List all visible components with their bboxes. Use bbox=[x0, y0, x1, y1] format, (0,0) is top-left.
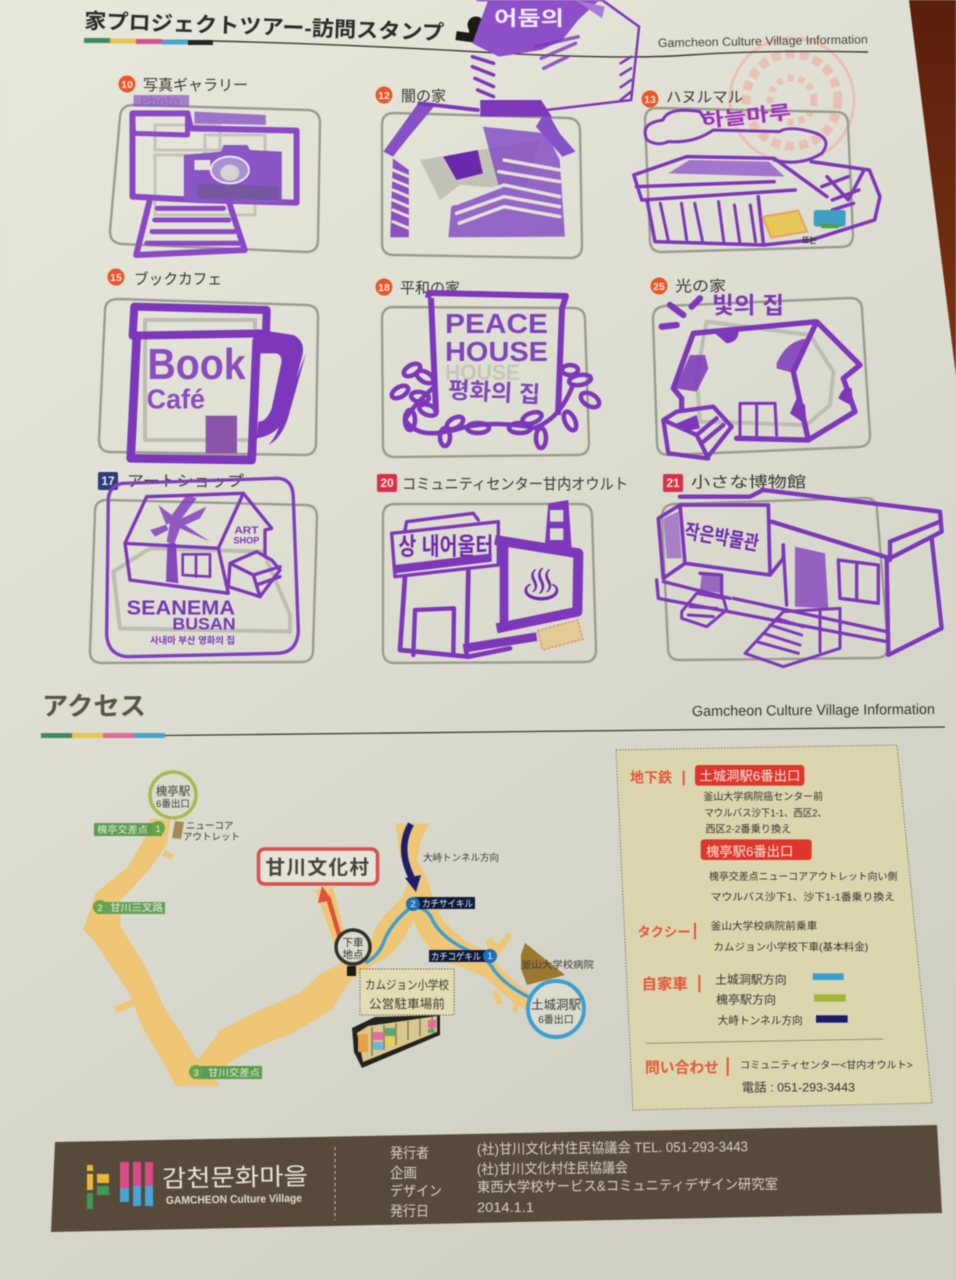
stamp card 25: house of light bbox=[650, 278, 870, 458]
card outline bbox=[653, 298, 870, 455]
imprint values: (社)甘川文化村住民協議会 bbox=[477, 1159, 628, 1177]
stamp lettering: 평화의 집 bbox=[448, 377, 541, 408]
card outline bbox=[662, 498, 888, 660]
navy label 1: カチコゲキル bbox=[431, 951, 481, 963]
green label 2: 2 bbox=[97, 903, 103, 914]
car section: 槐亭駅方向 bbox=[716, 992, 776, 1006]
stamp art gift house: 사내마 부산 영화의 집 bbox=[150, 635, 235, 646]
stamp lettering: 하늘마루 bbox=[700, 101, 792, 133]
green label 3 bbox=[189, 1065, 262, 1079]
taxi section: タクシー bbox=[637, 925, 691, 940]
imprint values bbox=[477, 1138, 778, 1215]
stamp card 17: art shop bbox=[90, 472, 317, 663]
stamp art building right bbox=[463, 500, 583, 650]
label: 写真ギャラリー bbox=[143, 76, 248, 94]
badge: 12 bbox=[378, 90, 390, 102]
parking label bbox=[360, 969, 454, 1015]
new core outlet: ニューコア bbox=[186, 821, 234, 832]
section header: access bbox=[41, 693, 945, 738]
stamp art house bbox=[383, 100, 576, 237]
contact section: コミュニティセンター<甘内オウルト> bbox=[740, 1058, 913, 1071]
stamp art building bbox=[634, 110, 880, 245]
stamp lettering: Photo bbox=[140, 93, 180, 109]
stamp card 13: hanulmaru bbox=[634, 89, 880, 252]
imprint values: 東西大学校サービス&コミュニティデザイン研究室 bbox=[477, 1176, 778, 1195]
stamp card 15: book cafe bbox=[99, 268, 318, 460]
logo korean: 감천문화마을 bbox=[162, 1163, 308, 1193]
tunnel direction: 大峙トンネル方向 bbox=[423, 852, 499, 864]
subway section: 地下鉄 bbox=[630, 770, 672, 786]
subway section: 槐亭交差点ニューコアアウトレット向い側 bbox=[709, 870, 897, 883]
card outline bbox=[383, 504, 596, 663]
badge bbox=[377, 474, 397, 492]
title: 家プロジェクトツアー-訪問スタンプ bbox=[84, 10, 444, 45]
card outline bbox=[645, 108, 853, 252]
stamp art building left: 상 내어울터 bbox=[398, 533, 493, 560]
village name box bbox=[258, 849, 378, 884]
navy arrow bbox=[404, 824, 421, 892]
panel contents bbox=[630, 765, 913, 1095]
small note: 또는 bbox=[802, 236, 817, 245]
badge bbox=[376, 86, 392, 104]
green label 2 bbox=[93, 900, 165, 914]
stamp card 18: peace house bbox=[376, 278, 602, 457]
hospital bbox=[521, 943, 595, 985]
green label 2: 甘川三叉路 bbox=[110, 902, 164, 914]
subway section: 釜山大学病院癌センター前 bbox=[703, 790, 823, 803]
roads bbox=[83, 818, 533, 1086]
stamp card 20: community center bbox=[377, 474, 628, 663]
access colour strip bbox=[41, 733, 165, 738]
stamp lettering: PEACE bbox=[445, 308, 548, 339]
footer background bbox=[51, 1125, 942, 1232]
imprint values: 2014.1.1 bbox=[477, 1199, 534, 1215]
contact section: 問い合わせ bbox=[645, 1060, 719, 1077]
school building bbox=[352, 1015, 440, 1068]
green label 3: 3 bbox=[193, 1068, 199, 1079]
badge bbox=[650, 278, 668, 294]
label: ハヌルマル bbox=[666, 89, 743, 106]
stamp art leaf garland bbox=[390, 361, 602, 448]
hospital: 釜山大学校病院 bbox=[521, 959, 595, 971]
stamp art museum: 작은박물관 bbox=[683, 520, 761, 555]
new core outlet: アウトレット bbox=[183, 832, 240, 843]
stamp lettering bbox=[445, 308, 548, 408]
badge: 25 bbox=[653, 281, 665, 293]
subway section: マウルバス沙下1-1、西区2、 bbox=[704, 806, 827, 819]
subway section: マウルバス沙下1、沙下1-1番乗り換え bbox=[711, 890, 895, 903]
drop-off pin: 下車 bbox=[342, 936, 364, 949]
station: toseong-dong: 6番出口 bbox=[538, 1014, 574, 1026]
subway section: 槐亭駅6番出口 bbox=[706, 843, 793, 859]
stamp frame bbox=[428, 293, 566, 415]
car section bbox=[642, 972, 848, 1027]
top stamp caption: 어둠의 bbox=[494, 7, 564, 30]
stamp art mug: Café bbox=[147, 383, 205, 414]
station: goejeong bbox=[150, 772, 196, 818]
pink round seal bbox=[730, 38, 854, 162]
info panel bbox=[616, 745, 932, 1110]
badge: 15 bbox=[110, 272, 122, 284]
subway section: 土城洞駅6番出口 bbox=[699, 769, 800, 784]
badge bbox=[118, 76, 136, 92]
icon: stamp bbox=[455, 16, 486, 44]
station: toseong-dong: 土城洞駅 bbox=[531, 998, 581, 1012]
badge: 10 bbox=[121, 79, 133, 91]
imprint labels: 発行日 bbox=[390, 1203, 429, 1219]
header rule bbox=[212, 41, 868, 57]
card outline bbox=[110, 105, 320, 252]
drop-off pin bbox=[336, 930, 370, 976]
panel divider bbox=[646, 1039, 883, 1043]
label: アートショップ bbox=[127, 473, 244, 490]
parking label: 公営駐車場前 bbox=[369, 996, 445, 1011]
logo english: GAMCHEON Culture Village bbox=[166, 1193, 302, 1207]
contact section bbox=[645, 1057, 913, 1095]
stamp art building left bbox=[392, 513, 510, 657]
stamp lettering: HOUSE bbox=[445, 336, 548, 367]
car section: 土城洞駅方向 bbox=[715, 972, 787, 986]
badge bbox=[98, 472, 118, 490]
badge bbox=[642, 90, 658, 108]
stamp art gift house: SHOP bbox=[233, 535, 259, 545]
access map bbox=[83, 772, 595, 1086]
drop-off pin: 地点 bbox=[342, 948, 364, 961]
new core outlet bbox=[172, 821, 240, 843]
label: 闇の家 bbox=[401, 88, 446, 105]
station: goejeong: 槐亭駅 bbox=[156, 784, 191, 798]
badge: 20 bbox=[380, 476, 394, 490]
stamp card 10: photo gallery bbox=[110, 76, 320, 255]
card outline bbox=[99, 299, 318, 455]
navy label 2 bbox=[406, 897, 475, 911]
imprint values: (社)甘川文化村住民協議会 TEL. 051-293-3443 bbox=[477, 1138, 748, 1157]
printed art bbox=[420, 140, 540, 200]
panel background bbox=[616, 745, 932, 1110]
stamp art museum bbox=[657, 490, 942, 667]
green label 1 bbox=[94, 821, 165, 836]
red arrow to village bbox=[318, 886, 340, 938]
stamp art camera bbox=[132, 95, 297, 255]
card outline bbox=[90, 500, 317, 663]
parking label: カムジョン小学校 bbox=[365, 977, 449, 992]
imprint labels: 企画 bbox=[390, 1165, 417, 1181]
printed art bbox=[155, 125, 265, 215]
label: 平和の家 bbox=[400, 280, 460, 297]
navy label 1 bbox=[429, 949, 497, 963]
label: 小さな博物館 bbox=[691, 474, 806, 491]
stamp art gift house bbox=[107, 478, 298, 657]
label: 光の家 bbox=[675, 278, 726, 295]
green label 1: 槐亭交差点 bbox=[97, 824, 149, 836]
stamp art gift house: BUSAN bbox=[172, 614, 236, 633]
badge: 13 bbox=[644, 94, 656, 106]
stamp art house bbox=[662, 298, 860, 458]
footer band bbox=[51, 1125, 942, 1232]
wooden table corner bbox=[909, 0, 956, 376]
blue route bbox=[365, 907, 531, 998]
stamp art gift house: ART bbox=[234, 525, 259, 536]
stamp card 12: house of darkness bbox=[376, 86, 582, 258]
badge: 18 bbox=[378, 282, 390, 294]
logo mark bbox=[87, 1162, 153, 1209]
colour strip bbox=[84, 38, 213, 45]
subway section: 西区2-2番乗り換え bbox=[705, 824, 791, 836]
badge bbox=[376, 278, 392, 296]
taxi section bbox=[637, 920, 868, 953]
green label 1: 1 bbox=[155, 824, 161, 835]
access heading: アクセス bbox=[42, 693, 146, 721]
stamp card 21: small museum bbox=[657, 474, 942, 667]
badge: 17 bbox=[101, 474, 115, 488]
card outline bbox=[382, 113, 582, 258]
badge bbox=[663, 474, 683, 492]
contact section: 電話 : 051-293-3443 bbox=[742, 1081, 855, 1095]
imprint labels: デザイン bbox=[390, 1183, 442, 1199]
village name box: 甘川文化村 bbox=[265, 857, 371, 879]
stamp lettering: 빛의 집 bbox=[712, 292, 784, 318]
badge bbox=[108, 268, 124, 286]
navy label 2: 2 bbox=[410, 899, 416, 910]
imprint labels bbox=[390, 1145, 442, 1219]
imprint labels: 発行者 bbox=[390, 1145, 429, 1161]
stamp lettering: HOUSE bbox=[445, 360, 520, 385]
badge: 21 bbox=[666, 476, 680, 490]
header right caption: Gamcheon Culture Village Information bbox=[658, 32, 868, 50]
section header: stamps bbox=[84, 10, 868, 57]
label: ブックカフェ bbox=[134, 270, 222, 288]
access rule bbox=[165, 727, 945, 736]
taxi section: 釜山大学校病院前乗車 bbox=[711, 920, 817, 933]
stamp art mug: Book bbox=[147, 341, 246, 389]
stamp art mug bbox=[131, 307, 306, 460]
subway section bbox=[630, 765, 897, 903]
access caption: Gamcheon Culture Village Information bbox=[692, 702, 935, 720]
navy label 2: カチサイキル bbox=[422, 899, 473, 910]
footer divider bbox=[334, 1147, 336, 1220]
top overflow stamp bbox=[472, 0, 639, 110]
station: goejeong: 6番出口 bbox=[156, 798, 190, 810]
car section: 自家車 bbox=[642, 975, 688, 993]
station: toseong-dong bbox=[528, 981, 584, 1037]
car section: 大峙トンネル方向 bbox=[718, 1014, 803, 1027]
label: コミュニティセンター甘内オウルト bbox=[402, 476, 628, 493]
stamp art gift house: SEANEMA bbox=[127, 597, 235, 619]
stamp art building right: ♨ bbox=[521, 565, 561, 609]
green label 3: 甘川交差点 bbox=[208, 1067, 261, 1079]
navy label 1: 1 bbox=[487, 951, 493, 962]
card outline bbox=[382, 307, 589, 457]
taxi section: カムジョン小学校下車(基本料金) bbox=[713, 940, 868, 953]
